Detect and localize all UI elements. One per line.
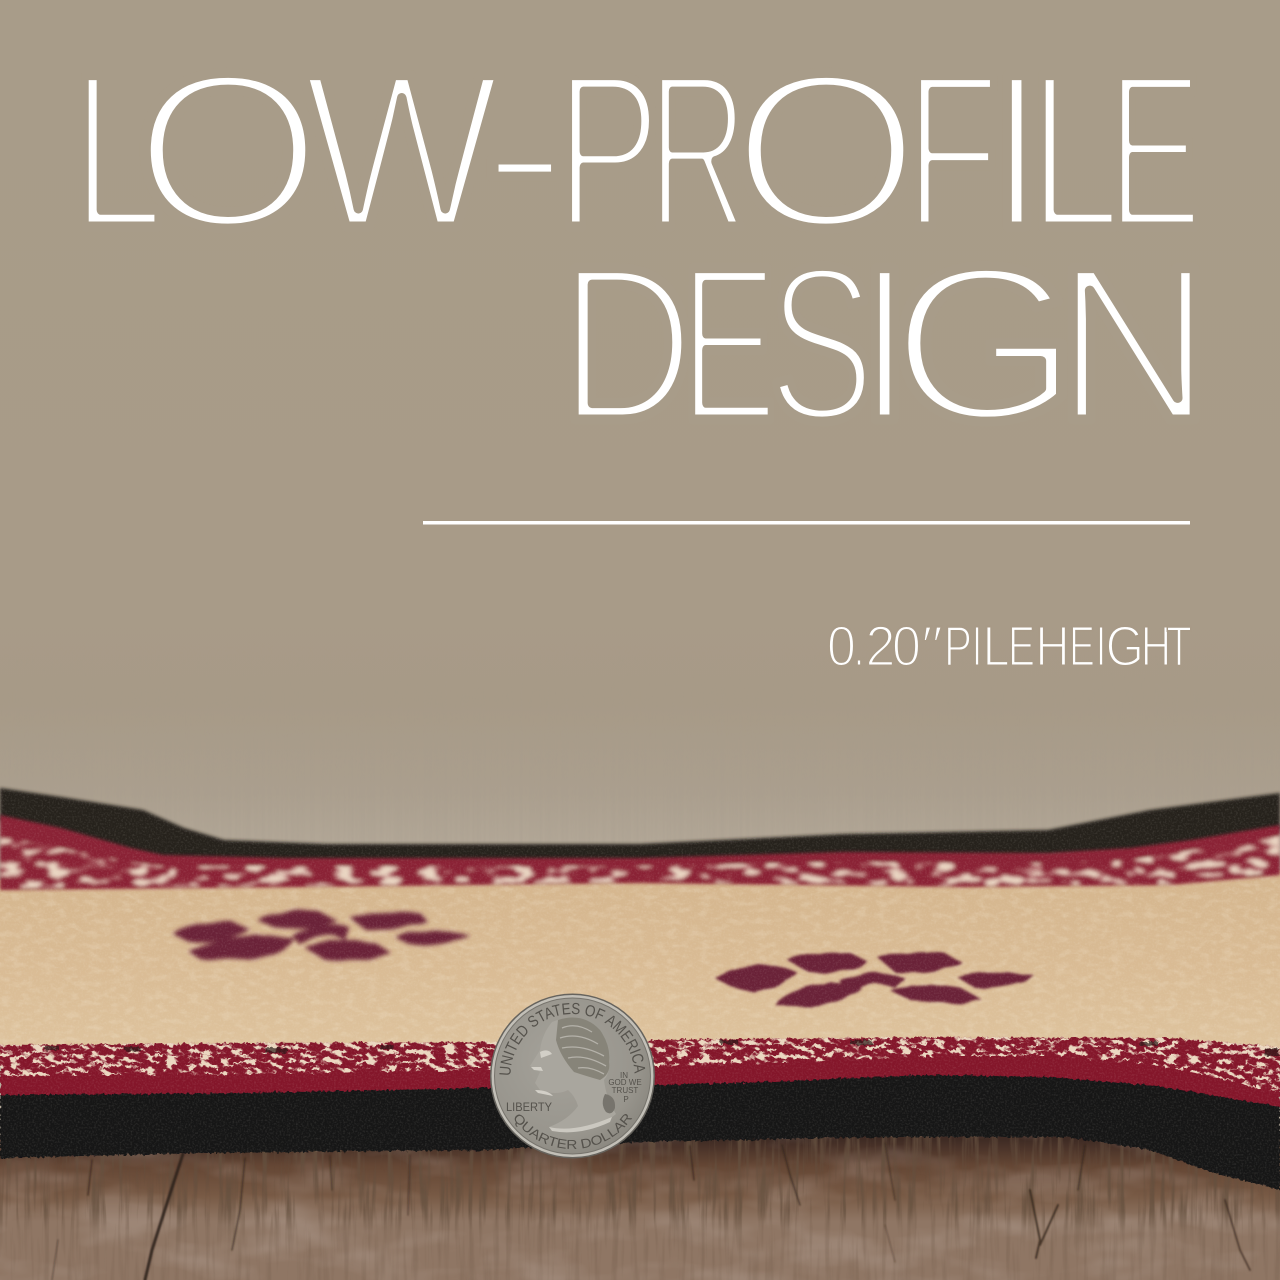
coin legend: UNITED STATES OF AMERICA: UNITED STATES OF AMERICA — [499, 1002, 646, 1075]
title line 2: N — [1055, 220, 1212, 466]
title line 1: L — [1028, 28, 1121, 274]
title line 2: S — [768, 220, 875, 466]
subtitle: pile height: 2 — [866, 614, 896, 678]
subtitle: pile height: . — [854, 614, 864, 678]
coin legend: QUARTER DOLLAR: QUARTER DOLLAR — [514, 1114, 632, 1149]
wood plank seams and cracks — [52, 1143, 1250, 1280]
subtitle: pile height: H — [1036, 614, 1070, 678]
coin legend: LIBERTY: LIBERTY — [506, 1100, 552, 1114]
rug paw print, right — [715, 952, 1035, 1006]
title line 2: I — [857, 220, 912, 466]
blurred floor ribbing behind the rug — [0, 640, 1280, 870]
title line 1: E — [1107, 28, 1202, 274]
coin legend: IN GOD WE TRUST and mint mark: TRUST — [612, 1086, 638, 1095]
title line 2: E — [680, 220, 777, 466]
rug back black border, out of focus — [0, 788, 1280, 862]
rug front black bound edge — [0, 1075, 1280, 1190]
coin legend: IN GOD WE TRUST and mint mark: GOD WE — [608, 1078, 642, 1087]
coin: US quarter dollar — [490, 994, 655, 1158]
title line 1: W — [303, 28, 500, 274]
subtitle: pile height: I — [1096, 614, 1106, 678]
subtitle: pile height: H — [1141, 614, 1171, 678]
coin legend: IN GOD WE TRUST and mint mark: IN — [620, 1071, 628, 1080]
subtitle: pile height: T — [1166, 614, 1192, 678]
subtitle: pile height: 0 — [892, 614, 921, 678]
portrait of Washington — [530, 1018, 616, 1132]
subtitle: pile height: I — [972, 614, 982, 678]
subtitle: pile height: ″ — [921, 614, 943, 678]
title line 1: P — [556, 28, 661, 274]
coin legend: IN GOD WE TRUST and mint mark: P — [623, 1095, 629, 1104]
title line 2: D — [559, 220, 695, 466]
wood floor — [0, 1135, 1280, 1280]
subtitle: pile height: 0 — [827, 614, 856, 678]
rug — [0, 780, 1280, 1195]
rug field mottling — [0, 870, 1280, 1055]
title: LOW-PROFILE DESIGN — [71, 28, 1212, 466]
subtitle: pile height: G — [1106, 614, 1144, 678]
subtitle: pile height: E — [1069, 614, 1095, 678]
title line 1: O — [134, 28, 322, 274]
rug back red patterned band — [0, 815, 1280, 892]
title line 1: F — [905, 28, 1000, 274]
divider line — [423, 521, 1190, 524]
title line 1: O — [732, 28, 920, 274]
title line 1: - — [481, 28, 569, 274]
dark flecks along the band — [45, 1040, 1279, 1056]
title line 1: L — [71, 28, 164, 274]
title line 2: G — [891, 220, 1080, 466]
rug cream field — [0, 870, 1280, 1060]
subtitle: pile height: P — [944, 614, 972, 678]
rug paw print, left — [172, 910, 470, 961]
rug front red patterned band — [0, 1035, 1280, 1107]
coin legend: IN GOD WE TRUST and mint mark — [608, 1071, 642, 1104]
subtitle: pile height: L — [983, 614, 1010, 678]
title line 1: I — [989, 28, 1044, 274]
rug fibre texture — [0, 780, 1280, 1195]
title line 1: R — [648, 28, 748, 274]
subtitle: pile height: E — [1008, 614, 1035, 678]
